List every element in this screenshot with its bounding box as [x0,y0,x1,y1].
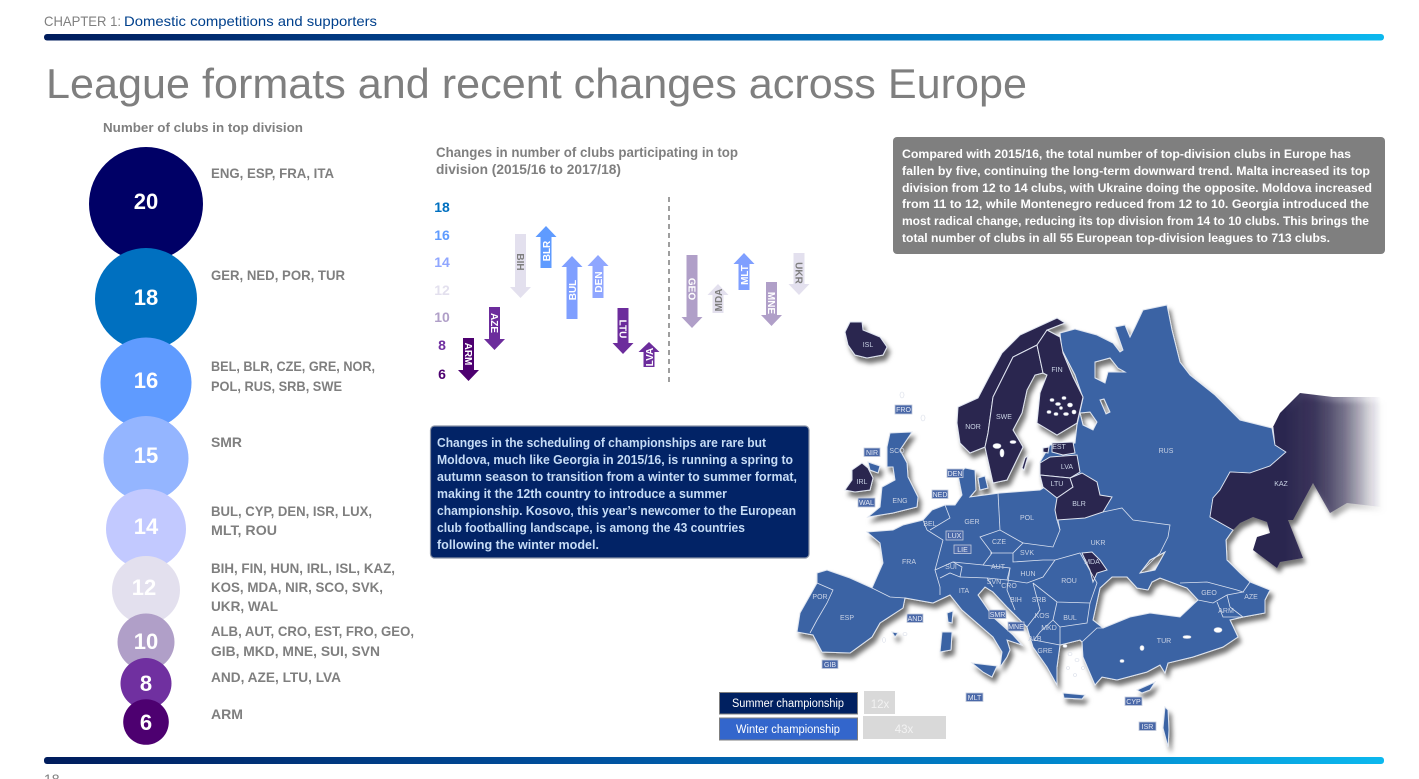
arrow: BLR: BLR [542,240,553,261]
country lists: BEL, BLR, CZE, GRE, NOR, [211,358,375,374]
map boxed small-country labels: NED [933,492,947,499]
bubble values: 18 [134,285,158,310]
arrow: MDA: MDA [714,289,725,311]
country lists: BIH, FIN, HUN, IRL, ISL, KAZ, [211,560,395,576]
heading: number of clubs: Number of clubs in top division [103,120,303,135]
country lists: SMR [211,434,242,450]
land: mainland Europe [797,305,1286,685]
callout: total clubs summary: most radical change, reducing its top division from 14 to 10 clubs. This brings the [902,214,1369,228]
bubble values: 6 [140,710,152,735]
land: Great Britain [868,432,918,517]
arrow: BLR [536,226,556,268]
chart divider [668,197,670,385]
bubble values: 14 [134,514,159,539]
map country names: ENG [892,498,908,505]
callout: total clubs summary [893,137,1385,254]
chapter header: CHAPTER 1: [44,13,121,29]
legend: summer championship: Summer championship [732,698,844,710]
chart axis values: 12 [434,282,450,298]
land: Estonia [1052,442,1075,455]
arrow: UKR: UKR [792,262,804,285]
callout: total clubs summary: division from 12 to 14 clubs, with Ukraine doing the opposite. Moldova increased [902,181,1372,195]
title: League formats and recent changes across Europe [46,60,1027,107]
bubble values: 15 [134,443,158,468]
map country names: BUL [1063,615,1077,622]
arrow: BUL: BUL [568,280,579,300]
legend: summer championship: 12x [871,699,890,711]
map country names: CZE [992,539,1006,546]
chart axis values: 10 [434,309,450,325]
bubble values [132,189,159,735]
map country names: EST [1052,444,1067,451]
arrow: LVA [638,342,660,367]
map boxed small-country labels: AND [908,616,922,623]
map boxed small-country labels: LIE [957,547,968,554]
map country names: KOS [1035,613,1050,620]
callout: championship scheduling: Moldova, much like Georgia in 2015/16, is running a spring to [437,453,793,467]
country lists [211,165,414,722]
chart axis values [434,199,450,382]
map boxed small-country labels: FRO [896,407,911,414]
map country names: SVN [987,579,1001,586]
land: Iceland [845,322,887,358]
map of Europe [797,305,1381,747]
land: Sweden [985,345,1043,483]
map country names: ARM [1218,608,1234,615]
map country names: SRB [1032,597,1047,604]
callout: total clubs summary: fallen by five, continuing the long-term downward trend. Malta increased its top [902,164,1370,178]
legend: summer championship [720,691,895,714]
map country names: ISL [863,342,873,349]
land: Norway [957,318,1065,453]
map country names: CRO [1001,583,1017,590]
map country names: GRE [1037,648,1053,655]
map country names: LVA [1061,464,1073,471]
chart axis values: 6 [438,366,446,382]
country lists: UKR, WAL [211,598,278,614]
arrow: MDA [708,284,728,313]
bubble values: 16 [134,368,158,393]
map boxed small-country labels [822,405,1156,731]
map boxed small-country labels: ISR [1142,724,1153,731]
arrow: MNE [761,282,782,326]
map country names: SWE [996,414,1012,421]
bubble values: 8 [140,671,152,696]
callout: championship scheduling: making it the 12th country to introduce a summer [437,487,727,501]
panel: changes in number of clubs [434,145,810,385]
land: Belarus [1055,473,1112,520]
arrow: LTU [612,308,634,354]
arrow: AZE [484,307,505,350]
map land masses [797,305,1381,747]
map country names: AZE [1244,594,1258,601]
map boxed small-country labels: MNE [1008,624,1024,631]
map country names: AUT [991,564,1006,571]
arrow: AZE: AZE [488,313,499,333]
map country names: MKD [1041,625,1057,632]
heading: changes chart: Changes in number of clubs participating in top [436,145,738,160]
map country names: ALB [1028,636,1042,643]
map country names: SCO [889,448,905,455]
arrow: MLT [734,253,754,290]
map country names: BIH [1010,597,1022,604]
arrow: ARM: ARM [462,343,473,365]
country lists: ARM [211,706,243,722]
map country names: NOR [965,424,981,431]
map country names: RUS [1159,448,1174,455]
map country names: BEL [923,521,937,528]
country borders [810,427,1286,645]
map country names: GER [964,519,980,526]
map country names: SUI [945,564,957,571]
chapter header: Domestic competitions and supporters [124,13,377,29]
country lists: ALB, AUT, CRO, EST, FRO, GEO, [211,623,414,639]
land: Northern Ireland [868,462,880,473]
map country names: KAZ [1274,481,1289,488]
legend: championship formats [720,691,946,740]
bubble values: 20 [134,189,158,214]
map country names: ROU [1061,578,1077,585]
callout: championship scheduling: autumn season to transition from a winter to summer format, [437,470,797,484]
map country names [812,342,1289,655]
land: islands [892,447,1169,747]
land: Latvia [1040,455,1080,478]
bubble values: 10 [134,629,158,654]
country lists: AND, AZE, LTU, LVA [211,669,341,685]
map boxed small-country labels: LUX [948,533,962,540]
map boxed small-country labels: SMR [990,612,1005,619]
arrow: DEN: DEN [594,271,605,293]
chart axis values: 16 [434,227,450,243]
callout: total clubs summary: from 11 to 12, while Montenegro reduced from 12 to 10. Georgia introduced the [902,197,1369,211]
map country names: TUR [1157,638,1171,645]
map country names: BLR [1072,501,1086,508]
country lists: ENG, ESP, FRA, ITA [211,165,334,181]
small lakes and islets [882,392,1222,676]
bubble stack [89,147,203,745]
country lists: MLT, ROU [211,522,277,538]
map country names: MDA [1084,559,1100,566]
heading: changes chart: division (2015/16 to 2017/18) [436,162,621,177]
map boxed small-country labels: CYP [1126,699,1141,706]
legend: winter championship: Winter championship [736,724,840,736]
country lists: BUL, CYP, DEN, ISR, LUX, [211,503,372,519]
arrow: LTU: LTU [616,320,628,338]
arrow: GEO [682,255,702,328]
arrow: ARM [458,338,479,381]
arrow: BIH: BIH [514,253,525,271]
bottom gradient bar [44,757,1384,764]
map boxed small-country labels: NIR [866,450,878,457]
callout: championship scheduling: championship. Kosovo, this year’s newcomer to the European [437,504,796,518]
country lists: GER, NED, POR, TUR [211,267,345,283]
chart axis values: 18 [434,199,450,215]
map country names: UKR [1091,540,1105,547]
callout: total clubs summary: Compared with 2015/16, the total number of top-division clubs in Europe has [902,147,1351,161]
panel: number of clubs in top division [89,120,414,745]
country lists: POL, RUS, SRB, SWE [211,378,342,394]
arrow: MLT: MLT [740,265,751,285]
land: Finland [1037,330,1083,435]
map country names: POR [812,594,828,601]
arrow: BIH [510,234,531,298]
callout: championship scheduling: Changes in the scheduling of championships are rare but [437,436,767,450]
arrow: MNE: MNE [765,292,776,314]
map country names: FIN [1051,367,1063,374]
map country names: ITA [959,588,970,595]
land: Moldova [1082,552,1107,582]
map boxed small-country labels: MLT [968,695,982,702]
top gradient bar [44,34,1384,40]
callout: total clubs summary: total number of clubs in all 55 European top-division leagues to 713 clubs. [902,231,1330,245]
map country names: LTU [1051,481,1063,488]
map boxed small-country labels: DEN [948,471,962,478]
legend: winter championship [720,716,946,740]
chart axis values: 14 [434,254,450,270]
land: Kazakhstan [1210,393,1381,568]
map country names: IRL [857,479,868,486]
map country names: HUN [1020,571,1036,578]
map country names: FRA [902,559,916,566]
legend: winter championship: 43x [895,724,914,736]
land: Lithuania [1040,475,1073,498]
map country names: SVK [1020,550,1034,557]
chart axis values: 8 [438,337,446,353]
country lists: KOS, MDA, NIR, SCO, SVK, [211,579,383,595]
heading: changes chart [436,145,738,177]
arrow: LVA: LVA [645,348,656,366]
bubble values: 12 [132,575,156,600]
arrow: BUL [562,256,582,319]
arrow: UKR [788,253,810,295]
arrow: GEO: GEO [686,278,696,300]
map country names: ESP [840,615,854,622]
land: Ireland [845,463,873,492]
map country names: POL [1020,515,1034,522]
callout: championship scheduling: following the winter model. [437,538,599,552]
map boxed small-country labels: WAL [859,500,874,507]
callout: championship scheduling [430,426,809,558]
country lists: GIB, MKD, MNE, SUI, SVN [211,643,380,659]
map boxed small-country labels: GIB [824,662,836,669]
callout: championship scheduling: club footballing landscape, is among the 43 countries [437,521,745,535]
arrow: DEN [588,255,608,298]
map country names: GEO [1201,590,1217,597]
